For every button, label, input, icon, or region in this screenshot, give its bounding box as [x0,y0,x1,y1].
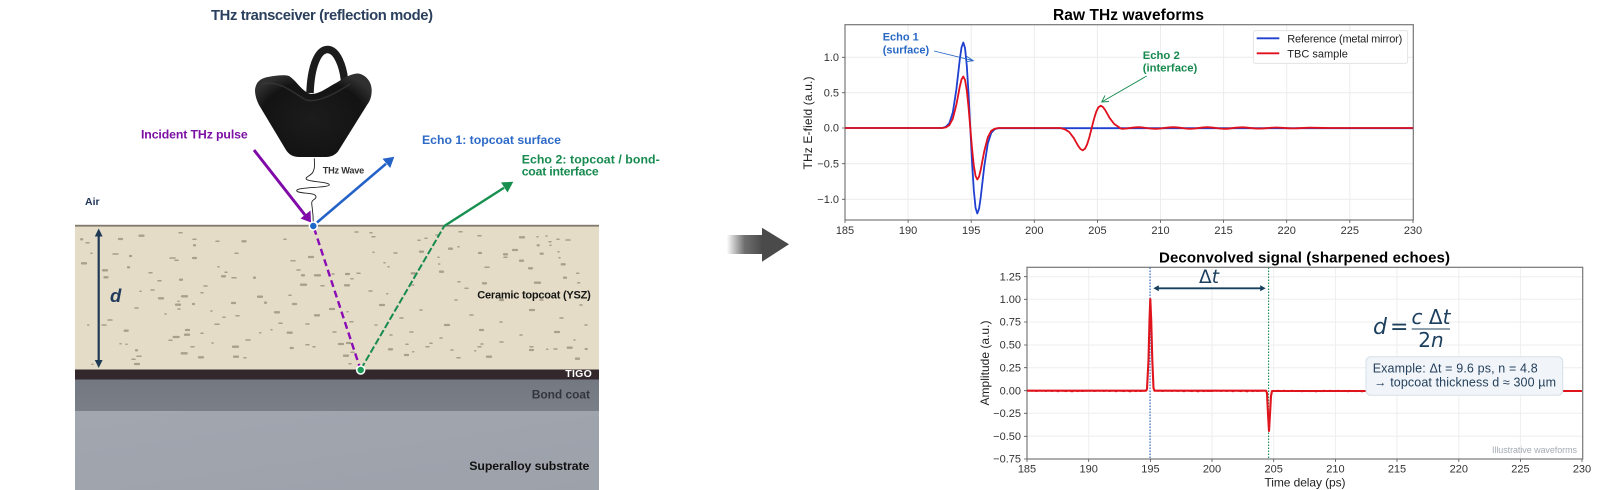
surface reflection point [309,222,317,230]
icon: THz transceiver [255,49,372,157]
y tick labels: −0.75 [993,454,1021,466]
legend: TBC sample [1287,48,1348,60]
label: air: Air [85,196,100,208]
thickness formula: = [1390,315,1408,340]
label: THz Wave: THz Wave [323,165,364,175]
label: echo 2: Echo 2: topcoat / bond- [522,152,660,166]
echo 2 marker line [1268,268,1270,459]
y tick labels: 0.50 [1000,340,1021,352]
echo 1 annotation: Echo 1 [883,32,919,44]
x tick labels: 195 [1141,463,1160,475]
y tick labels: −1.0 [817,194,839,206]
y axis label: THz E-field (a.u.) [801,76,815,170]
y tick labels: 1.00 [1000,294,1021,306]
reflected path up [361,226,444,369]
example callout: → topcoat thickness d ≈ 300 µm [1374,376,1556,390]
y tick labels: −0.25 [993,408,1021,420]
x tick labels: 215 [1388,463,1406,475]
x axis label: Time delay (ps) [1264,476,1346,490]
x tick labels: 230 [1404,225,1422,237]
y tick labels: −0.5 [817,158,839,170]
thickness formula: c Δt [1412,305,1452,329]
echo 2 annotation: (interface) [1143,62,1198,74]
y axis label: Amplitude (a.u.) [978,320,992,406]
left panel: THz reflection-mode diagram [75,8,660,490]
x tick labels: 200 [1203,463,1221,475]
incident arrow [254,150,311,222]
y tick labels [817,52,839,206]
thickness formula: d [1373,315,1388,340]
delta-t arrow [1153,285,1266,291]
x tick labels: 220 [1278,225,1296,237]
x tick labels: 215 [1214,225,1233,237]
label: superalloy substrate: Superalloy substrate [469,459,589,473]
axes frame [845,25,1413,220]
label: echo 1: Echo 1: topcoat surface [422,133,561,147]
x tick labels: 205 [1265,463,1283,475]
echo 2 annotation: Echo 2 [1143,50,1180,62]
layer: bond coat [75,380,599,411]
chart title: Deconvolved signal (sharpened echoes) [1159,250,1450,267]
echo 1 marker line [1149,268,1151,459]
layer: superalloy substrate [75,411,599,490]
x tick labels: 225 [1511,463,1530,475]
layer: ceramic topcoat [75,226,599,370]
x tick labels: 200 [1025,225,1043,237]
echo 1 annotation [883,32,973,62]
deconvolved trace [1027,299,1582,431]
chart title: Raw THz waveforms [1053,7,1204,24]
x tick labels: 210 [1326,463,1345,475]
note: illustrative waveforms: Illustrative waveforms [1492,445,1578,455]
x tick labels: 225 [1341,225,1359,237]
echo 1 arrow [317,157,394,222]
label: TGO: TIGO [565,368,592,380]
x tick labels: 185 [1018,463,1036,475]
thickness arrow d [95,228,103,368]
delta-t label: Δt [1199,267,1220,288]
x tick labels [836,225,1422,237]
layer: TGO [75,370,599,380]
label: bond coat: Bond coat [532,388,590,402]
y tick labels [993,271,1021,466]
x tick labels: 230 [1573,463,1591,475]
x tick labels [1018,463,1591,475]
y tick labels: 0.75 [1000,317,1021,329]
y tick labels: 1.0 [824,52,839,64]
example callout [1366,357,1563,395]
y tick labels: 0.0 [824,123,839,135]
refracted path down [314,228,360,368]
sample curve [845,76,1413,180]
label: d: d [110,285,122,306]
THz wave squiggle [297,158,329,223]
reference curve [845,42,1413,214]
thickness formula: 2n [1418,328,1444,352]
y tick labels: 1.25 [1000,271,1021,283]
topcoat surface line [75,225,599,227]
y tick labels: 0.25 [1000,362,1021,374]
y tick labels: 0.00 [1000,385,1021,397]
chart: deconvolved signal [978,250,1591,490]
x tick labels: 195 [962,225,980,237]
chart: raw THz waveforms [801,7,1422,237]
x tick labels: 185 [836,225,854,237]
y tick labels: 0.5 [824,88,839,100]
topcoat pores [81,232,587,364]
thickness formula [1373,305,1452,352]
label: echo 2 [522,152,660,178]
legend: Reference (metal mirror) [1287,34,1402,46]
axes frame [1027,267,1583,459]
label: echo 2: coat interface [522,164,599,178]
echo 2 arrow [444,182,513,226]
x tick labels: 220 [1450,463,1468,475]
x tick labels: 205 [1088,225,1107,237]
y tick labels: −0.50 [993,431,1021,443]
label: ceramic topcoat: Ceramic topcoat (YSZ) [477,289,591,301]
diagram title: THz transceiver (reflection mode) [211,8,433,24]
x tick labels: 190 [899,225,917,237]
legend [1253,31,1408,63]
x tick labels: 210 [1151,225,1170,237]
x tick labels: 190 [1080,463,1098,475]
arrow between panels [727,228,789,262]
example callout: Example: Δt = 9.6 ps, n = 4.8 [1373,362,1538,376]
echo 2 annotation [1102,50,1198,102]
interface reflection point [357,366,365,374]
echo 1 annotation: (surface) [883,44,929,56]
label: incident pulse: Incident THz pulse [141,128,248,142]
